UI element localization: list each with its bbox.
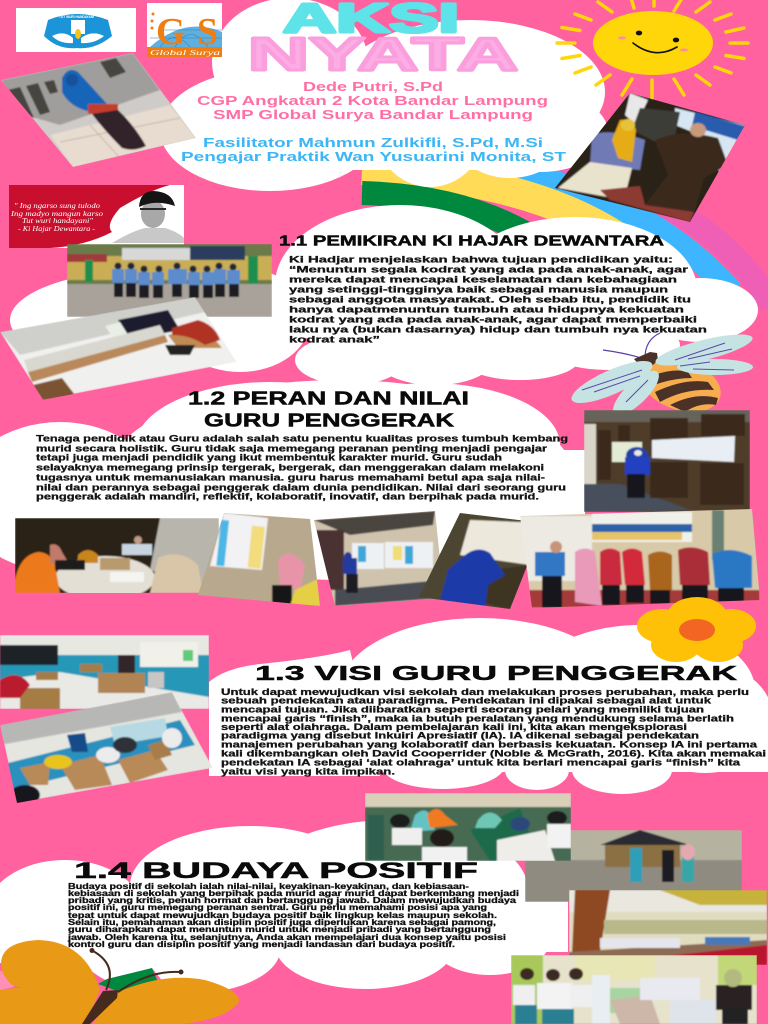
author credits: CGP Angkatan 2 Kota Bandar Lampung — [197, 93, 548, 108]
text block: 1.2: Tenaga pendidik atau Guru adalah salah satu penentu kualitas proses tumbuh kembang — [36, 434, 568, 444]
cloud: section 1.3 — [209, 618, 768, 794]
logo: Global Surya: GS — [156, 11, 218, 53]
photo: school group — [67, 244, 272, 317]
text block: 1.1: kodrat yang ada pada anak-anak, agar dapat memperbaiki — [289, 314, 697, 326]
text block: 1.1: hanya dapatmenuntun tumbuh atau hidupnya kekuatan — [289, 304, 684, 316]
text block: 1.1 — [289, 254, 707, 346]
text block: 1.1: Ki Hadjar menjelaskan bahwa tujuan pendidikan yaitu: — [289, 254, 673, 266]
heading: 1.2: GURU PENGGERAK — [204, 410, 454, 430]
photo: group with banner — [520, 508, 762, 610]
icon: butterfly — [0, 940, 239, 1024]
text block: 1.1: “Menuntun segala kodrat yang ada pada anak-anak, agar — [289, 264, 688, 276]
cloud: header — [160, 0, 608, 191]
photo: Ki Hajar Dewantara quote: Ing madyo mangun karso — [10, 210, 104, 218]
logo: Global Surya — [147, 3, 222, 57]
text block: 1.3: mencapai garis “finish”, maka ia butuh peralatan yang mendukung selama berlatih — [221, 714, 734, 724]
photo: classroom with students — [0, 297, 237, 400]
text block: 1.4: jawab. Oleh karena itu, selanjutnya, Anda akan mempelajari dua konsep yaitu posisi — [67, 933, 506, 942]
text block: 1.2: murid secara holistik. Guru tidak saja memegang peranan penting menjadi pengajar — [36, 444, 547, 454]
cloud: section 1.4 — [0, 820, 568, 995]
text block: 1.1: sebagai anggota masyarakat. Oleh sebab itu, pendidik itu — [289, 294, 691, 306]
text block: 1.4: pribadi yang kritis, penuh hormat dan bertanggung jawab. Dalam mewujudkan budaya — [68, 896, 517, 905]
photo: woman writing on poster — [419, 513, 527, 609]
text block: 1.1: yang setinggi-tingginya baik sebagai manusia maupun — [289, 284, 668, 296]
icon: yellow flower — [637, 597, 756, 662]
author credits — [181, 79, 566, 164]
text block: 1.4: kebiasaan di sekolah yang berpihak pada murid agar murid dapat berkembang menjadi — [68, 889, 519, 898]
author credits: Fasilitator Mahmun Zulkifli, S.Pd, M.Si — [203, 135, 543, 150]
title: Aksi Nyata: NYATA — [248, 28, 518, 80]
photo: woman with sticky notes — [198, 513, 320, 606]
text block: 1.4: kontrol guru dan disiplin positif yang menjadi landasan dari budaya positif. — [68, 940, 455, 949]
photo: workshop table discussion — [15, 518, 219, 600]
text block: 1.4: guru diharapkan dapat menuntun murid untuk menjadi pribadi yang bertanggung — [68, 925, 491, 934]
text block: 1.1: mereka dapat mencapai keselamatan dan kebahagiaan — [289, 274, 677, 286]
rainbow corner — [0, 968, 165, 1024]
text block: 1.3: mencapai tujuan. Jika diibaratkan seperti seorang pelari yang memiliki tujuan — [221, 704, 704, 716]
photo: classroom with whiteboard — [0, 635, 209, 709]
text block: 1.3: manajemen perubahan yang kolaboratif dan berbasis kekuatan. Konsep IA ini pertama — [221, 740, 758, 750]
logo: Tut Wuri Handayani — [16, 8, 136, 52]
heading: 1.3: 1.3 VISI GURU PENGGERAK — [255, 663, 738, 685]
photo: teacher with facilitator — [550, 90, 750, 225]
heading: 1.4: 1.4 BUDAYA POSITIF — [74, 858, 478, 883]
photo: Ki Hajar Dewantara quote — [9, 185, 184, 248]
text block: 1.1: laku nya (bukan dasarnya) hidup dan tumbuh nya kekuatan — [289, 324, 707, 336]
photo: woman in display room — [314, 511, 440, 606]
photo: outdoor school gazebo — [525, 830, 742, 902]
photo: students visiting patient — [511, 955, 757, 1024]
heading: 1.2 — [188, 388, 469, 430]
text block: 1.4 — [67, 882, 519, 949]
text block: 1.1: kodrat anak” — [289, 334, 380, 346]
cloud: section 1.2 — [0, 380, 585, 580]
photo: prayer room discussion — [365, 793, 571, 861]
photo: teacher at display door — [584, 410, 750, 512]
text block: 1.2: tugasnya untuk memanusiakan manusia. guru harus memahami betul apa saja nilai- — [36, 472, 545, 484]
photo: Ki Hajar Dewantara quote: - Ki Hajar Dewantara - — [18, 225, 96, 233]
text block: 1.2: tetapi juga menjadi pendidik yang ikut membentuk karakter murid. Guru sudah — [36, 452, 502, 464]
text block: 1.2: nilai dan perannya sebagai penggerak dalam dunia pendidikan. Nilai dari seorang guru — [36, 482, 566, 494]
text block: 1.3 — [221, 687, 766, 778]
text block: 1.2: penggerak adalah mandiri, reflektif, kolaboratif, inovatif, dan berpihak pada murid. — [36, 492, 539, 502]
text block: 1.4: tepat untuk dapat mewujudkan budaya positif baik lingkup kelas maupun sekolah. — [68, 911, 497, 920]
heading: 1.2: 1.2 PERAN DAN NILAI — [188, 388, 469, 408]
author credits: SMP Global Surya Bandar Lampung — [213, 107, 533, 122]
text block: 1.2: selayaknya memegang prinsip tergerak, bergerak, dan menggerakan dalam melakoni — [36, 462, 544, 474]
text block: 1.3: pendekatan IA sebagai ‘alat olahraga’ untuk kita berlari mencapai garis “finish” kita — [221, 758, 741, 768]
text block: 1.4: positif ini, guru memegang peranan sentral. Guru perlu memahami posisi apa yang — [68, 903, 487, 912]
author credits: Dede Putri, S.Pd — [303, 79, 443, 94]
text block: 1.4: Budaya positif di sekolah ialah nilai-nilai, keyakinan-keyakinan, dan kebiasaan- — [68, 882, 469, 891]
text block: 1.3: paradigma yang disebut Inkuiri Apresiatif (IA). IA dikenal sebagai pendekatan — [221, 730, 699, 742]
photo: Ki Hajar Dewantara quote: Tut wuri handayani" — [22, 217, 93, 225]
logo: Tut Wuri Handayani: TUT WURI HANDAYANI — [59, 15, 94, 19]
text block: 1.3: seperti alat olahraga. Dalam pembelajaran kali ini, kita akan mengeksplorasi — [221, 722, 687, 733]
text block: 1.4: Selain itu, pemahaman akan disiplin positif juga diperlukan karena sebagai pamong, — [68, 918, 496, 927]
logo: Global Surya: Global Surya — [150, 48, 220, 57]
cloud: section 1.1 — [10, 205, 758, 385]
text block: 1.3: Untuk dapat mewujudkan visi sekolah dan melakukan proses perubahan, maka perlu — [221, 687, 749, 698]
icon: smiling sun — [557, 0, 748, 98]
photo: students in classroom — [0, 692, 213, 805]
rainbow arc — [362, 160, 768, 305]
text block: 1.2 — [36, 434, 568, 502]
title: Aksi Nyata — [248, 0, 518, 80]
icon: bee — [567, 328, 755, 422]
text block: 1.3: kali dikembangkan oleh David Cooperrider (Noble & McGrath, 2016). Kita akan memakai — [221, 748, 766, 760]
author credits: Pengajar Praktik Wan Yusuarini Monita, ST — [181, 149, 566, 164]
text block: 1.3: yaitu visi yang kita impikan. — [221, 766, 395, 778]
photo: teacher portrait — [0, 50, 200, 170]
photo: Ki Hajar Dewantara quote: " Ing ngarso sung tulodo — [14, 202, 101, 210]
photo: mosque hall — [569, 890, 767, 965]
text block: 1.3: sebuah pendekatan atau paradigma. Pendekatan ini dipakai sebagai alat untuk — [221, 696, 712, 706]
heading: 1.1: 1.1 PEMIKIRAN KI HAJAR DEWANTARA — [279, 232, 664, 250]
